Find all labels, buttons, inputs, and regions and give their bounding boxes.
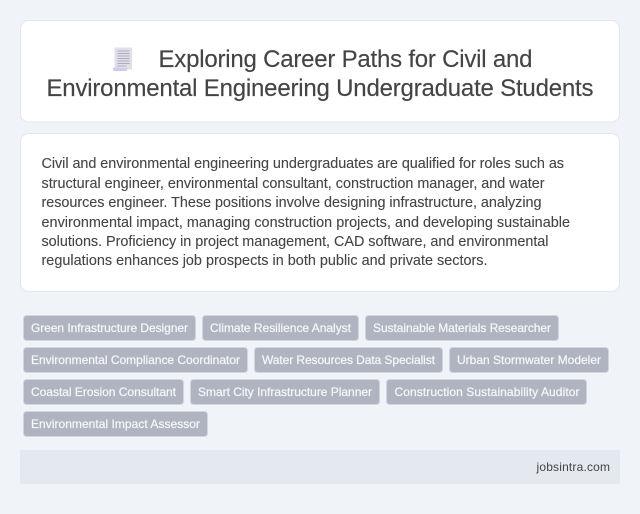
panel: description: [20, 134, 620, 292]
tag: [24, 316, 196, 340]
text block: description: regulations enhances job prospects in both public and private sectors.: [42, 253, 488, 269]
tag: Coastal Erosion Consultant: [31, 385, 177, 399]
footer source: jobsintra.com: [536, 460, 610, 474]
tags: career paths: [24, 316, 608, 436]
tag: [366, 316, 558, 340]
tag: Construction Sustainability Auditor: [394, 385, 580, 399]
tag: [24, 412, 208, 436]
text block: description: environmental impact, managing construction projects, and developing sustainable: [42, 215, 570, 231]
panel: title card: [20, 20, 620, 122]
tag: Environmental Compliance Coordinator: [31, 353, 240, 367]
text block: description: [42, 156, 570, 269]
tag: [24, 380, 184, 404]
tag: [386, 380, 586, 404]
tag: Environmental Impact Assessor: [31, 417, 200, 431]
tag: [254, 348, 442, 372]
tag: Smart City Infrastructure Planner: [198, 385, 372, 399]
heading: [46, 46, 594, 102]
tag: Climate Resilience Analyst: [210, 321, 352, 335]
tag: [24, 348, 248, 372]
heading: Exploring Career Paths for Civil and: [158, 46, 532, 73]
tag: [190, 380, 380, 404]
icon: paper receipt scroll: [113, 48, 132, 71]
text block: description: structural engineer, environmental consultant, construction manager, and water: [42, 176, 545, 192]
tag: Urban Stormwater Modeler: [457, 353, 601, 367]
text block: description: resources engineer. These positions involve designing infrastructure, analyzing: [42, 195, 542, 211]
text block: description: Civil and environmental engineering undergraduates are qualified for roles such as: [42, 156, 564, 172]
tag: [450, 348, 608, 372]
footer: [20, 450, 620, 484]
tag: Water Resources Data Specialist: [262, 353, 436, 367]
tag: [202, 316, 358, 340]
tag: Green Infrastructure Designer: [31, 321, 188, 335]
heading: Environmental Engineering Undergraduate Students: [46, 75, 594, 102]
tag: Sustainable Materials Researcher: [373, 321, 551, 335]
text block: description: solutions. Proficiency in project management, CAD software, and environmental: [42, 234, 548, 250]
